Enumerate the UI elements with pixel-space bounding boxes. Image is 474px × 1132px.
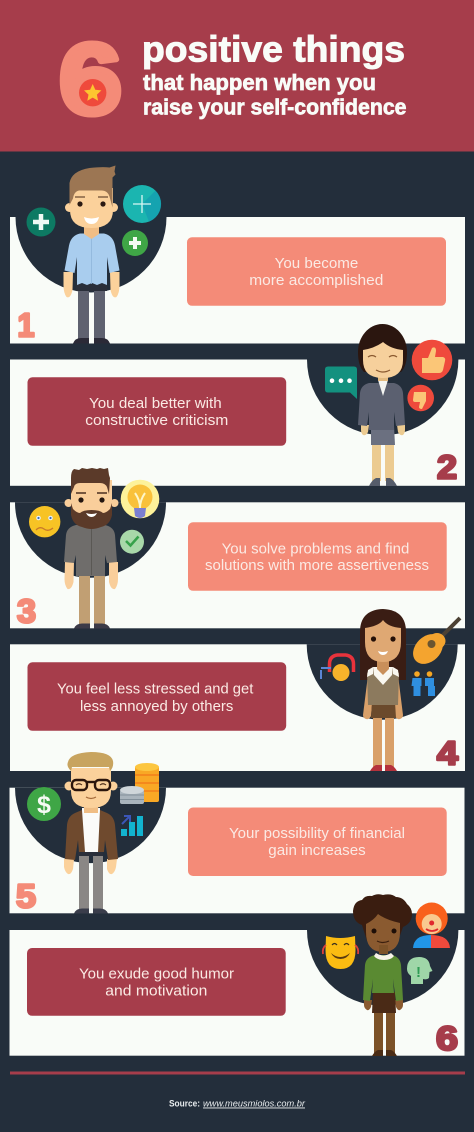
source credit: www.meusmiolos.com.br bbox=[203, 1098, 306, 1108]
icon: speech bubble bbox=[325, 366, 357, 399]
icon: stress clamp on head bbox=[321, 655, 354, 681]
icon: thumbs up bbox=[412, 340, 452, 380]
icon: light bulb bbox=[121, 480, 159, 518]
icon: two people arguing bbox=[412, 671, 435, 696]
numeral 2: 2 bbox=[437, 448, 457, 486]
title: positive things bbox=[142, 28, 405, 70]
panel 6 background bbox=[10, 930, 464, 1056]
callout 4: You feel less stressed and get bbox=[57, 682, 253, 698]
icon: thumbs down bbox=[407, 385, 434, 411]
title: that happen when you bbox=[143, 70, 376, 95]
callout 5: gain increases bbox=[268, 843, 366, 859]
panel 2 background bbox=[10, 360, 465, 486]
callout 1 bbox=[187, 237, 446, 306]
numeral 6: 6 bbox=[436, 1020, 458, 1058]
callout 4 bbox=[28, 662, 286, 731]
numeral 1: 1 bbox=[18, 306, 34, 344]
callout 3: You solve problems and find bbox=[222, 541, 409, 557]
header banner bbox=[0, 0, 474, 152]
panel 1 background bbox=[10, 217, 465, 344]
callout 2 bbox=[28, 377, 286, 446]
callout 3: solutions with more assertiveness bbox=[205, 558, 429, 574]
callout 6 bbox=[27, 948, 286, 1016]
panel 4 background bbox=[10, 644, 465, 771]
icon: check mark bbox=[120, 530, 144, 554]
icon: silver coin stack bbox=[120, 786, 144, 804]
icon: green plus badge bbox=[26, 208, 56, 236]
character 5: man with brown jacket and glasses bbox=[27, 752, 159, 914]
icon: head with exclamation mark bbox=[407, 957, 432, 984]
icon: dollar coin: $ bbox=[37, 791, 51, 819]
icon: guitar bbox=[407, 618, 460, 670]
callout 4: less annoyed by others bbox=[80, 699, 233, 715]
numeral 5: 5 bbox=[16, 878, 36, 914]
icon: teal plus badge bbox=[123, 185, 161, 223]
panel 5 background bbox=[10, 788, 464, 913]
icon: small green plus badge bbox=[122, 230, 148, 256]
callout 2: constructive criticism bbox=[85, 413, 228, 429]
numeral 3: 3 bbox=[17, 592, 36, 630]
icon: gold coin stack bbox=[135, 763, 159, 802]
title: raise your self-confidence bbox=[143, 94, 406, 120]
callout 5: Your possibility of financial bbox=[229, 826, 405, 842]
character 3: bearded man in grey shirt bbox=[29, 468, 159, 628]
callout 5 bbox=[188, 808, 447, 876]
callout 3 bbox=[188, 522, 447, 591]
callout 1: more accomplished bbox=[249, 273, 383, 289]
icon: dollar coin bbox=[27, 787, 61, 821]
icon: worried face bbox=[29, 506, 60, 537]
big number six: 6 bbox=[59, 24, 122, 136]
character 6: woman with curly hair and green sweater bbox=[323, 894, 450, 1056]
panel 3 background bbox=[10, 502, 465, 628]
character 1: man in blue shirt bbox=[26, 166, 161, 344]
icon: clown bbox=[413, 902, 450, 948]
callout 6: and motivation bbox=[105, 984, 207, 1000]
source credit: Source: bbox=[169, 1098, 200, 1108]
callout 6: You exude good humor bbox=[79, 967, 234, 983]
callout 2: You deal better with bbox=[89, 396, 222, 412]
icon: smiling theatre mask bbox=[323, 936, 358, 969]
icon: head with exclamation mark: ! bbox=[416, 964, 421, 981]
character 4: woman with tan vest bbox=[321, 609, 460, 771]
title bbox=[142, 28, 406, 120]
icon: rising bar chart bbox=[121, 816, 143, 836]
numeral 4: 4 bbox=[437, 734, 459, 772]
footer divider bbox=[10, 1072, 465, 1074]
callout 1: You become bbox=[275, 256, 358, 272]
character 2: woman in grey suit bbox=[325, 324, 452, 486]
